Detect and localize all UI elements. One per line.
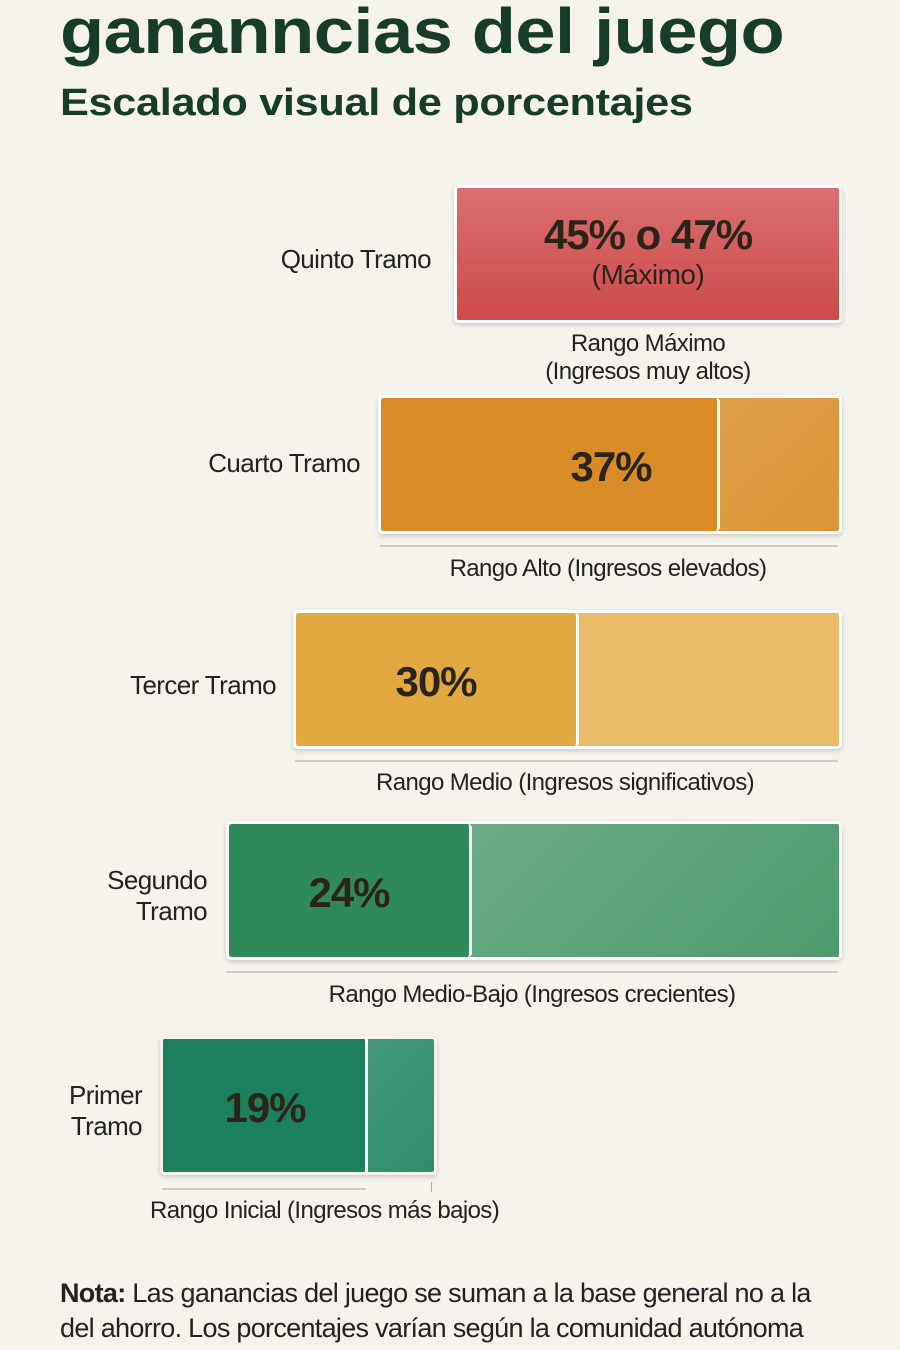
bar: 30%	[293, 610, 842, 749]
bar: 24%	[226, 821, 842, 960]
row: cuarto tramo	[208, 395, 844, 582]
label: primer tramo: Primer	[69, 1080, 142, 1110]
bar: 19%	[160, 1036, 437, 1175]
value: 45% o 47%	[544, 211, 752, 258]
value: 24%	[308, 869, 390, 916]
caption	[545, 330, 751, 385]
value: (Máximo)	[592, 259, 704, 290]
caption: Rango Alto (Ingresos elevados)	[450, 555, 766, 582]
label: segundo tramo: Segundo	[107, 865, 207, 895]
label: segundo tramo	[107, 865, 207, 926]
bar: 45% o 47%	[454, 185, 842, 323]
label: primer tramo	[69, 1080, 142, 1141]
row: tercer tramo	[130, 610, 844, 796]
value: 19%	[224, 1084, 306, 1131]
value: 30%	[395, 658, 477, 705]
caption: (Ingresos muy altos)	[545, 358, 751, 385]
caption: Rango Medio-Bajo (Ingresos crecientes)	[329, 981, 735, 1008]
value	[544, 211, 752, 290]
row: segundo tramo	[107, 821, 844, 1008]
note: Nota: Las ganancias del juego se suman a la base general no a la del ahorro. Los porcentajes varían según la comunidad autónoma	[60, 1278, 811, 1343]
label: primer tramo: Tramo	[71, 1111, 142, 1141]
bar: 37%	[378, 395, 842, 534]
caption: Rango Medio (Ingresos significativos)	[376, 769, 754, 796]
label: cuarto tramo: Cuarto Tramo	[208, 448, 360, 478]
value: 37%	[570, 443, 652, 490]
caption: Rango Inicial (Ingresos más bajos)	[150, 1197, 499, 1224]
label: quinto tramo: Quinto Tramo	[281, 244, 431, 274]
row: quinto tramo	[281, 185, 844, 385]
subtitle: Escalado visual de porcentajes	[60, 82, 693, 124]
label: tercer tramo: Tercer Tramo	[130, 670, 276, 700]
row: primer tramo	[69, 1038, 499, 1224]
label: segundo tramo: Tramo	[136, 896, 207, 926]
caption: Rango Máximo	[571, 330, 725, 357]
